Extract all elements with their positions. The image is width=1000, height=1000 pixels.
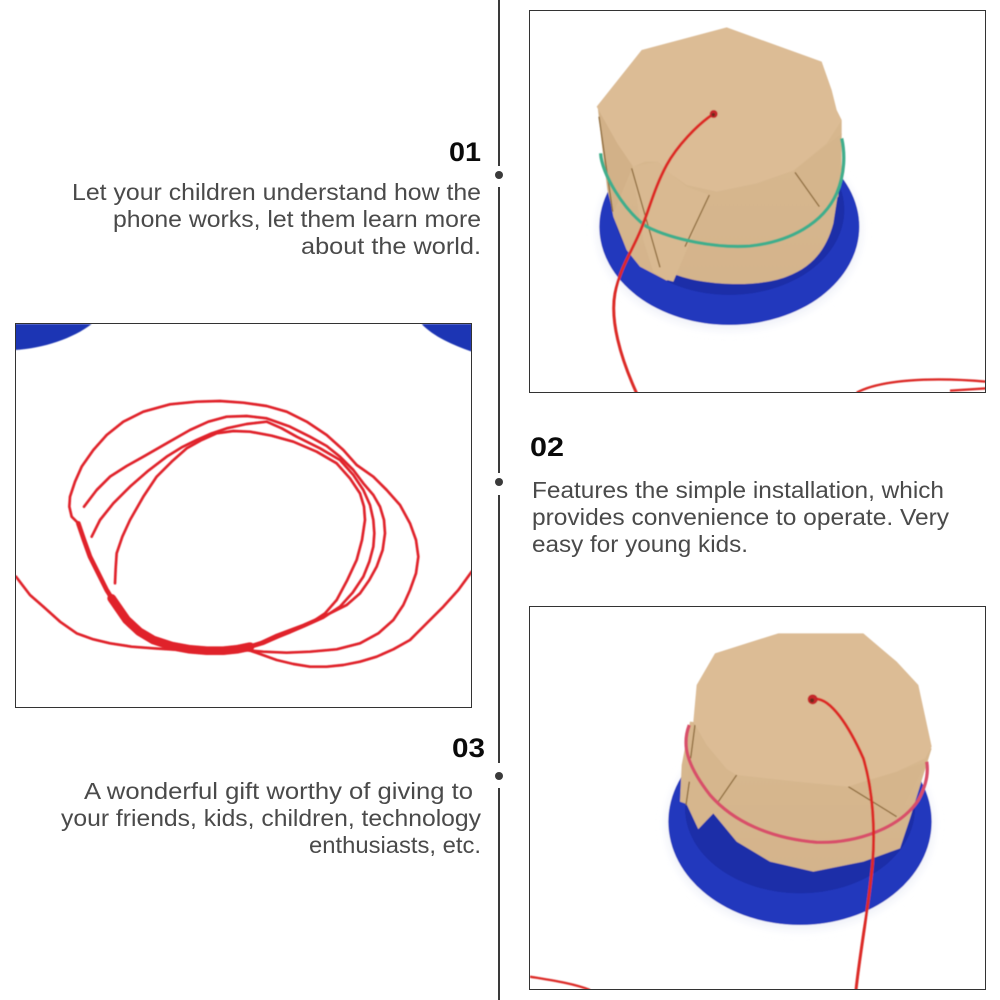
red thread — [813, 699, 874, 990]
description 01: Let your children understand how the — [72, 179, 481, 205]
cardboard top — [596, 26, 842, 120]
description 03: A wonderful gift worthy of giving to — [84, 778, 473, 804]
loose thread — [530, 977, 590, 990]
cardboard flaps — [686, 806, 699, 830]
thread coil — [16, 401, 472, 667]
cardboard body — [612, 120, 842, 285]
feature 02 — [530, 432, 950, 557]
blue disc edges — [15, 324, 472, 352]
timeline axis — [495, 0, 503, 1000]
green rubber band — [601, 138, 844, 246]
feature 03 — [61, 733, 485, 858]
photo: cup with green band — [530, 10, 987, 393]
feature 01 — [72, 137, 481, 259]
description 02: provides convenience to operate. Very — [532, 504, 950, 530]
loose thread — [857, 379, 987, 393]
red thread — [614, 114, 713, 393]
description 02: Features the simple installation, which — [532, 477, 944, 503]
description 03 — [61, 778, 482, 858]
cardboard body — [680, 722, 932, 872]
photo: cup with pink band — [530, 606, 986, 990]
description 01: phone works, let them learn more — [113, 206, 481, 232]
description 02: easy for young kids. — [532, 531, 748, 557]
description 01: about the world. — [301, 233, 481, 259]
cardboard flaps — [668, 275, 676, 282]
pink rubber band — [686, 725, 927, 842]
description 02 — [532, 477, 950, 557]
blue disc — [666, 776, 934, 930]
description 03: your friends, kids, children, technology — [61, 805, 482, 831]
number 03: 03 — [452, 733, 485, 763]
cardboard top — [693, 633, 932, 787]
photo: coiled red thread — [15, 324, 472, 708]
description 03: enthusiasts, etc. — [309, 832, 481, 858]
number 02: 02 — [530, 432, 564, 462]
blue disc — [598, 173, 861, 330]
description 01 — [72, 179, 481, 259]
number 01: 01 — [449, 137, 481, 167]
